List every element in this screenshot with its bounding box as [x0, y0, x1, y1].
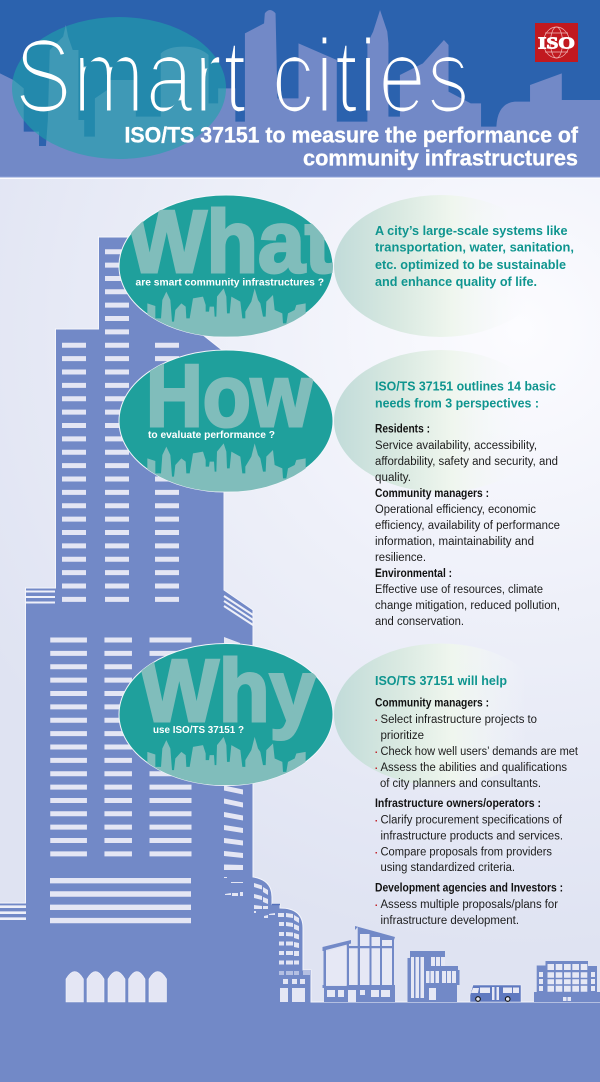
how description: Residents : [375, 424, 430, 436]
how subheading: to evaluate performance ? [148, 429, 275, 441]
why ellipse [119, 644, 333, 786]
panel: why [119, 641, 333, 786]
why description: using standardized criteria. [380, 862, 515, 874]
subtitle [124, 123, 578, 171]
why description: Clarify procurement specifications of [380, 814, 563, 826]
why description: of city planners and consultants. [380, 778, 541, 790]
apartment building [408, 951, 460, 1002]
why description: Infrastructure owners/operators : [375, 798, 541, 810]
subtitle: ISO/TS 37151 to measure the performance of [124, 123, 578, 148]
how description: Environmental : [375, 568, 452, 580]
why description: Community managers : [375, 698, 489, 710]
how description: and conservation. [375, 616, 464, 628]
header skyline [0, 10, 600, 177]
why mini skyline [147, 737, 306, 785]
how description: Community managers : [375, 488, 489, 500]
how description: resilience. [375, 552, 426, 564]
modern glass building [322, 926, 395, 1002]
what description [375, 224, 574, 289]
why description: Check how well users’ demands are met [380, 746, 579, 758]
what ellipse [119, 195, 333, 337]
how description: needs from 3 perspectives : [375, 396, 539, 410]
slanted windows [224, 637, 243, 896]
what description: etc. optimized to be sustainable [375, 258, 566, 272]
what heading: What [127, 192, 333, 291]
how description: efficiency, availability of performance [375, 520, 560, 532]
how description: change mitigation, reduced pollution, [375, 600, 560, 612]
how description [375, 380, 560, 628]
how description: information, maintainability and [375, 536, 534, 548]
why description: Assess multiple proposals/plans for [380, 899, 558, 911]
what description: A city’s large-scale systems like [375, 224, 568, 238]
why description: Compare proposals from providers [380, 846, 552, 858]
what description: transportation, water, sanitation, [375, 241, 574, 255]
why description: Assess the abilities and qualifications [380, 762, 567, 774]
title: Smart cities [14, 18, 470, 135]
upper windows [74, 249, 167, 602]
arched doors [66, 972, 166, 1002]
what subheading: are smart community infrastructures ? [136, 277, 324, 289]
how description: Service availability, accessibility, [375, 440, 537, 452]
how description: quality. [375, 472, 411, 484]
how description: ISO/TS 37151 outlines 14 basic [375, 380, 556, 394]
why description: infrastructure products and services. [380, 830, 563, 842]
panel: how [119, 346, 333, 492]
why heading: Why [140, 641, 316, 740]
panel: what [119, 192, 333, 337]
why description: Select infrastructure projects to [380, 714, 537, 726]
what description: and enhance quality of life. [375, 275, 537, 289]
icon: bus [470, 985, 521, 1002]
building silhouette [0, 237, 600, 1082]
why description: prioritize [380, 730, 424, 742]
how description: Operational efficiency, economic [375, 504, 536, 516]
teal ellipse [12, 17, 226, 159]
how heading: How [146, 346, 312, 445]
how ellipse [119, 350, 333, 492]
icon: ISO logo: ISO [538, 34, 575, 52]
what mini skyline [147, 288, 306, 337]
office building [534, 961, 600, 1002]
lower windows [69, 638, 170, 925]
why description: Development agencies and Investors : [375, 882, 563, 894]
panel: header [0, 0, 600, 177]
why pale ellipse [334, 644, 548, 786]
why description: infrastructure development. [380, 915, 519, 927]
cylinder windows [254, 883, 311, 1002]
balcony stripes [0, 592, 253, 919]
how description: Effective use of resources, climate [375, 584, 543, 596]
red bullets [376, 720, 377, 906]
how mini skyline [147, 443, 306, 492]
what pale ellipse [334, 195, 548, 337]
why description [375, 674, 579, 927]
how description: affordability, safety and security, and [375, 456, 558, 468]
why description: ISO/TS 37151 will help [375, 674, 507, 688]
why subheading: use ISO/TS 37151 ? [153, 724, 244, 736]
how pale ellipse [334, 350, 548, 492]
icon: ISO logo [535, 23, 578, 62]
subtitle: community infrastructures [303, 146, 578, 171]
